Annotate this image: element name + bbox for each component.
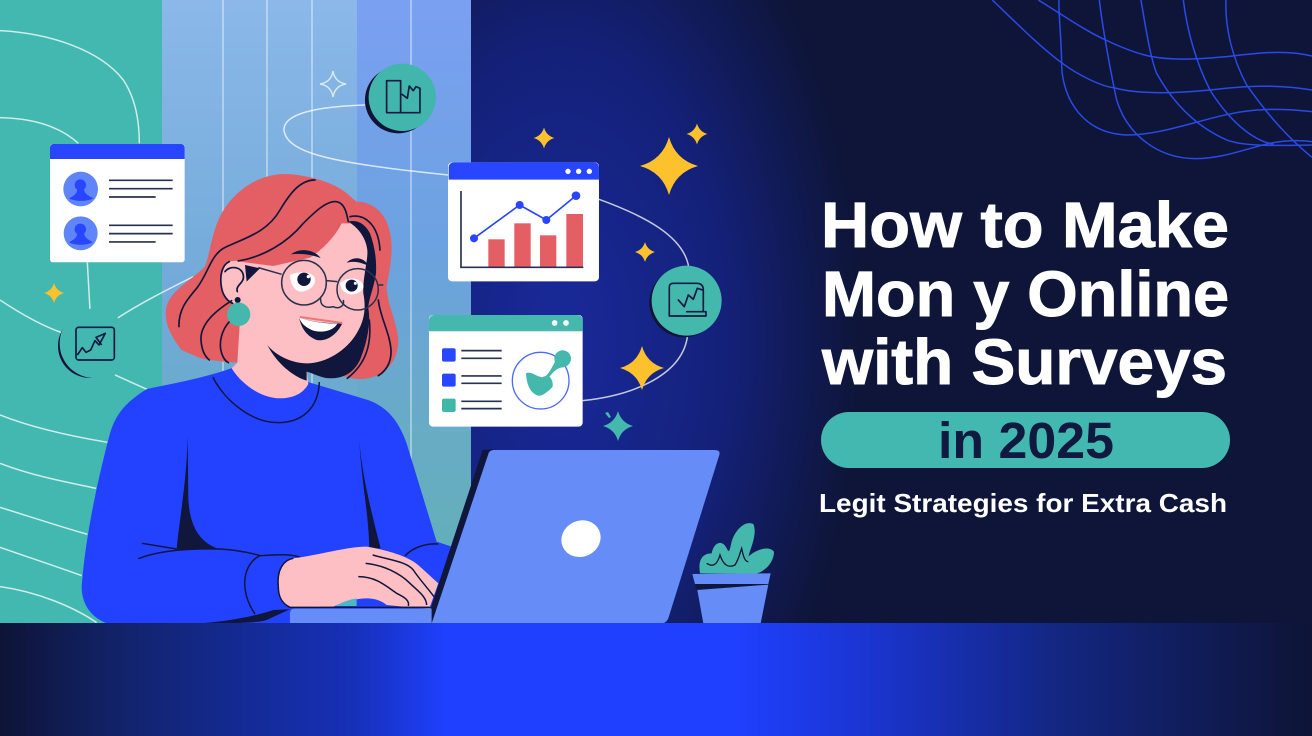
glasses xyxy=(258,260,383,310)
sideburn xyxy=(245,265,260,282)
wireframe mesh top right xyxy=(992,0,1312,159)
logo xyxy=(555,514,607,563)
sparkle: teal xyxy=(603,411,633,441)
hand xyxy=(278,547,438,607)
head: neck, hair and face xyxy=(166,174,398,398)
card: analytics chart xyxy=(448,162,599,281)
line chart xyxy=(470,191,580,242)
card header xyxy=(429,315,583,331)
card body xyxy=(429,315,583,427)
background: light blue panel xyxy=(162,0,358,624)
finger lines xyxy=(278,555,434,607)
icon: circle with laptop chart xyxy=(649,266,722,337)
axes xyxy=(461,191,583,267)
neckline xyxy=(213,377,319,423)
bar chart xyxy=(488,214,583,267)
pot xyxy=(692,573,771,584)
sparkle: yellow left xyxy=(44,283,64,303)
year badge: in 2025 xyxy=(938,412,1114,469)
connector arc right of cards xyxy=(583,199,689,401)
curved lines lower left xyxy=(0,415,107,623)
sparkle: yellow lower xyxy=(620,346,664,390)
text lines xyxy=(109,180,173,242)
dark hair shadow xyxy=(267,221,376,381)
title: Mon y Online xyxy=(822,258,1229,330)
avatar two xyxy=(64,216,98,250)
checklist xyxy=(442,348,502,412)
nose xyxy=(321,298,344,308)
title: with Surveys xyxy=(821,326,1227,398)
card body xyxy=(50,144,185,262)
laptop lid edge xyxy=(430,449,493,623)
title xyxy=(821,189,1229,398)
sparkle: yellow large xyxy=(640,137,698,195)
connector lines left panel xyxy=(0,31,448,390)
avatar one xyxy=(63,172,98,206)
hand and keyboard xyxy=(278,547,438,623)
card header xyxy=(50,144,185,159)
icon: potted plant xyxy=(692,523,774,623)
gap under hand xyxy=(335,598,357,606)
sparkle: yellow top xyxy=(534,128,554,148)
card: checklist with pie xyxy=(429,315,583,427)
background: periwinkle panel xyxy=(357,0,471,624)
body: blue sweater xyxy=(82,368,452,623)
laptop xyxy=(430,449,720,623)
keyboard xyxy=(290,609,432,623)
card: user profiles xyxy=(50,144,185,262)
face and neck xyxy=(221,223,372,398)
background: teal panel xyxy=(0,0,162,624)
mouth xyxy=(299,317,342,340)
sparkle: yellow top right xyxy=(686,124,708,144)
sparkle: outline xyxy=(320,71,346,97)
earring xyxy=(227,297,250,326)
sparkle: yellow middle xyxy=(635,242,655,262)
person illustration xyxy=(82,174,452,623)
card header xyxy=(449,162,599,180)
eyebrows xyxy=(291,250,369,266)
eyes xyxy=(290,272,363,294)
subtitle: Legit Strategies for Extra Cash xyxy=(819,488,1227,518)
pie icon xyxy=(512,350,571,409)
year badge xyxy=(821,412,1230,469)
title: How to Make xyxy=(821,189,1229,261)
icon: circle with column chart xyxy=(365,64,436,133)
desk xyxy=(0,623,1312,736)
hair strands xyxy=(179,180,391,378)
laptop lid xyxy=(432,450,720,623)
leaves xyxy=(699,523,774,574)
card body xyxy=(448,162,599,281)
icon: circle with line chart lower left xyxy=(58,309,129,378)
hair xyxy=(166,174,398,379)
